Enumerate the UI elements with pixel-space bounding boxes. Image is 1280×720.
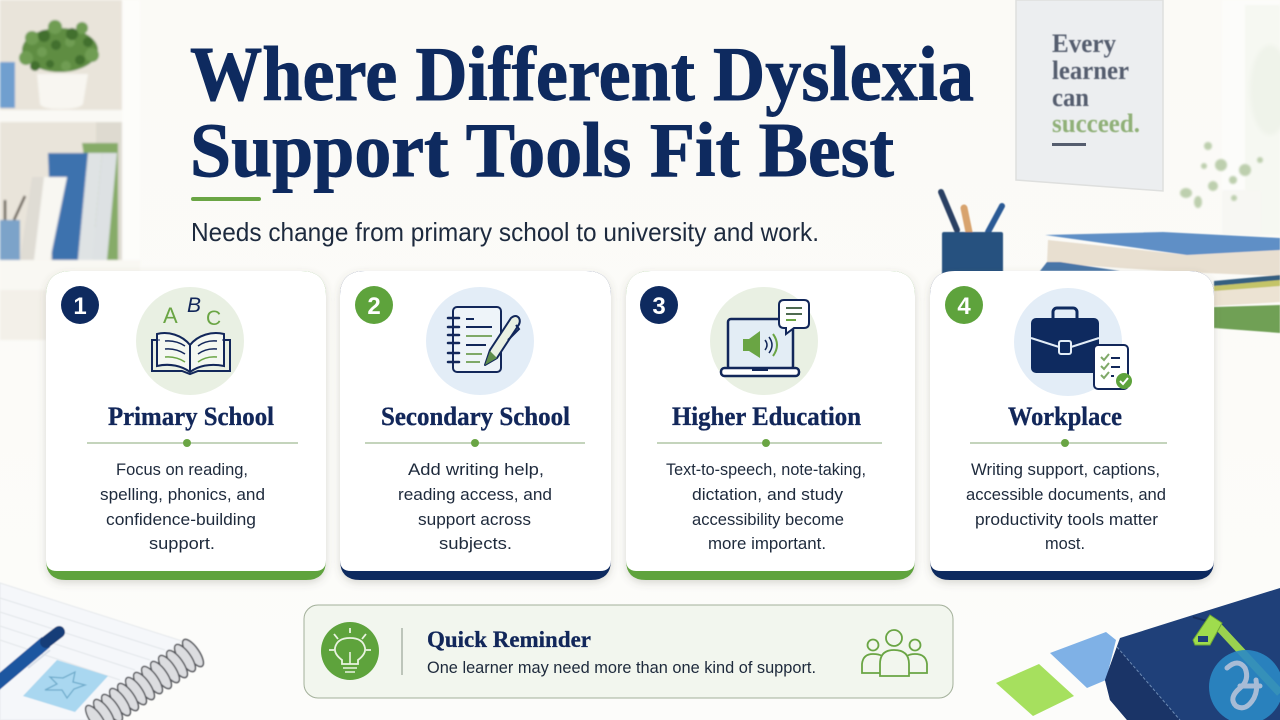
stacked books: [1040, 232, 1280, 333]
card 2 text: [398, 460, 552, 553]
card 3 divider: [657, 439, 882, 447]
card 1: primary school: [46, 271, 326, 580]
card 3 text: [666, 460, 866, 553]
card 4: workplace: [930, 271, 1214, 580]
title: Where Different Dyslexia: [190, 31, 974, 117]
poster: can: [1052, 83, 1090, 112]
card 3 text: accessibility become: [692, 510, 844, 529]
icon: open book with ABC: B: [187, 294, 201, 317]
pen cup: [941, 192, 1003, 276]
card 4 heading: Workplace: [1008, 402, 1122, 431]
card 2 text: subjects.: [439, 534, 512, 553]
card 3 text: more important.: [708, 534, 826, 553]
number badge 3: 3: [652, 293, 666, 320]
window and plant: [1180, 0, 1280, 235]
subtitle: Needs change from primary school to university and work.: [191, 217, 819, 247]
card 4 divider: [970, 439, 1167, 447]
star sticky note: [23, 660, 108, 712]
icon: open book with ABC: A: [163, 303, 178, 328]
number badge 1: 1: [73, 293, 87, 320]
card 2 text: support across: [418, 510, 531, 529]
card 1 text: [100, 460, 265, 553]
title underline: [191, 197, 261, 201]
number badge 1: [61, 286, 99, 324]
books: [0, 143, 118, 260]
title: Support Tools Fit Best: [190, 107, 894, 193]
card 2 divider: [365, 439, 585, 447]
card 4 text: [966, 460, 1166, 553]
card 1 text: support.: [149, 534, 215, 553]
card 1 text: confidence-building: [106, 510, 256, 529]
card 4 text: productivity tools matter: [975, 510, 1158, 529]
card 3 text: Text-to-speech, note-taking,: [666, 460, 866, 479]
icon: laptop with speaker: [710, 287, 818, 395]
card 4 text: Writing support, captions,: [971, 460, 1160, 479]
number badge 4: [945, 286, 983, 324]
icon: notebook and pen: [426, 287, 534, 395]
title: [190, 31, 974, 193]
card 2: secondary school: [340, 271, 611, 580]
card 3: higher education: [626, 271, 915, 580]
poster: succeed.: [1052, 109, 1140, 138]
icon: briefcase and checklist: [1014, 288, 1132, 396]
reminder heading: Quick Reminder: [427, 627, 591, 652]
quick reminder panel: [304, 605, 953, 698]
plant: [19, 20, 99, 109]
icon: open book with ABC: [136, 287, 244, 395]
card 1 heading: Primary School: [108, 402, 274, 431]
blue jar: [0, 62, 15, 108]
number badge 2: 2: [367, 293, 381, 320]
card 1 divider: [87, 439, 298, 447]
poster: learner: [1052, 56, 1129, 85]
poster: [1016, 0, 1163, 191]
reminder text: One learner may need more than one kind of support.: [427, 658, 816, 677]
card 4 text: most.: [1045, 534, 1085, 553]
notebook with pen and sticky note: [0, 583, 207, 720]
bookshelf scene: [0, 0, 140, 340]
icon: light bulb: [321, 622, 379, 680]
poster: Every: [1052, 29, 1116, 58]
card 1 text: spelling, phonics, and: [100, 485, 265, 504]
icon: open book with ABC: C: [206, 307, 221, 330]
number badge 2: [355, 286, 393, 324]
sticky notes: [996, 632, 1116, 716]
card 2 heading: Secondary School: [381, 402, 570, 431]
card 1 text: Focus on reading,: [116, 460, 248, 479]
watermark logo: [1209, 650, 1280, 720]
card 4 text: accessible documents, and: [966, 485, 1166, 504]
spiral binding: [82, 636, 207, 720]
pencil case with zipper: [1105, 588, 1280, 720]
card 2 text: reading access, and: [398, 485, 552, 504]
card 2 text: Add writing help,: [408, 460, 544, 479]
card 3 heading: Higher Education: [672, 402, 862, 431]
number badge 3: [640, 286, 678, 324]
card 3 text: dictation, and study: [692, 485, 844, 504]
icon: group of people: [862, 630, 927, 676]
number badge 4: 4: [957, 293, 971, 320]
pen: [0, 632, 59, 686]
